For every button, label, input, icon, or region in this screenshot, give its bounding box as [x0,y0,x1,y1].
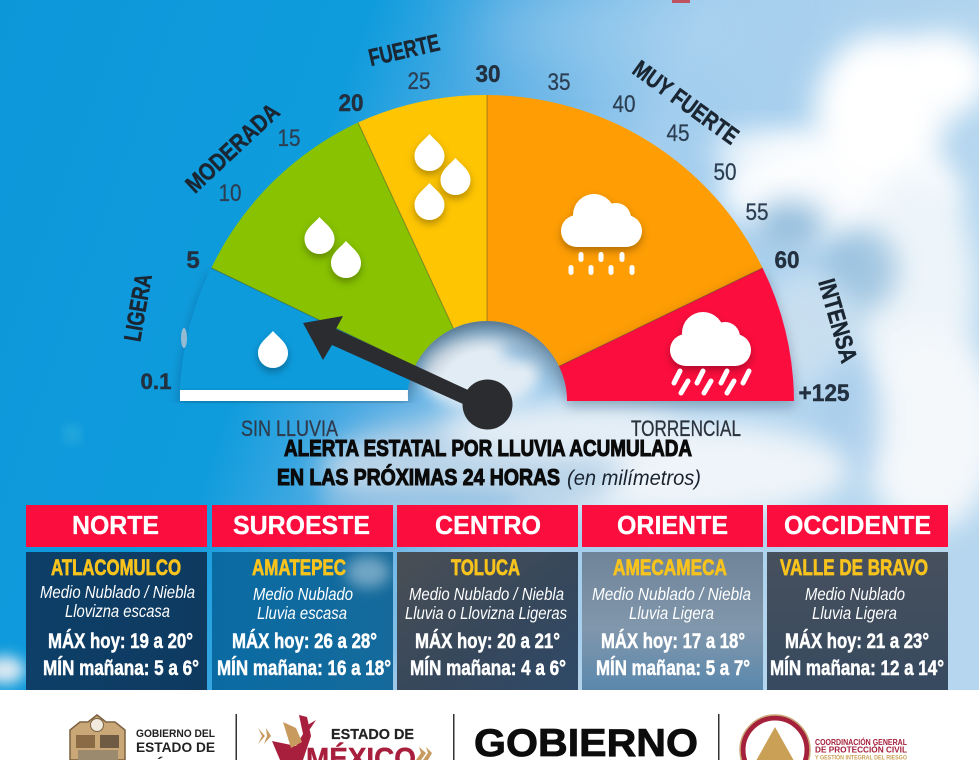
panel: centro: CENTRO [435,510,541,540]
panel: suroeste: AMATEPEC [252,555,346,580]
scale numbers: 10 [218,180,242,207]
panel: oriente [582,505,763,690]
icon: rain cloud [561,194,642,275]
panel: oriente: AMECAMECA [613,555,727,580]
icon: crest [70,715,125,760]
icon: two drops [304,217,361,278]
panel: suroeste: Lluvia escasa [257,603,347,623]
panel: norte: Medio Nublado / Niebla [40,582,195,602]
panel: occidente: Lluvia Ligera [812,603,897,623]
panel: occidente: Medio Nublado [805,584,905,604]
segment: ligera blue [180,268,415,390]
panel: occidente: VALLE DE BRAVO [780,555,928,580]
panel: suroeste: MÁX hoy: 26 a 28° [232,630,377,653]
white base bar [180,390,408,401]
panel: occidente [767,505,948,690]
panel: occidente: MÍN mañana: 12 a 14° [770,657,944,680]
category label: moderada: MODERADA [181,98,285,199]
gauge [180,95,794,401]
panel: centro: MÁX hoy: 20 a 21° [415,630,560,653]
scale numbers: 30 [476,61,500,88]
scale numbers [140,61,850,407]
panel: norte: MÁX hoy: 19 a 20° [48,630,193,653]
icon: triangle badge [740,715,810,760]
panel: occidente: OCCIDENTE [784,510,931,540]
icon: torrential cloud [670,312,751,393]
scale numbers: 20 [338,90,364,117]
scale numbers: +125 [798,380,850,407]
panel: centro: MÍN mañana: 4 a 6° [410,657,566,680]
logo: estado de mexico: ESTADO DE [331,726,414,743]
panel: norte: NORTE [72,510,159,540]
segment: intensa red [559,268,794,401]
panel: oriente: ORIENTE [617,510,728,540]
logo: proteccion civil [740,715,907,760]
panel: norte [26,505,207,690]
segment: muy fuerte orange [487,95,763,366]
panel: suroeste: SUROESTE [233,510,370,540]
category label: muy fuerte: MUY FUERTE [627,56,744,150]
title: ALERTA ESTATAL POR LLUVIA ACUMULADA [284,435,692,461]
category label: intensa: INTENSA [812,276,862,366]
panel: norte: ATLACOMULCO [51,555,181,580]
panel: suroeste: Medio Nublado [253,584,353,604]
scale numbers: 55 [746,199,768,226]
panel: suroeste [212,505,393,690]
hole shading [407,321,567,401]
icon: three drops [414,134,470,220]
scale numbers: 15 [278,125,300,152]
panel: oriente: MÁX hoy: 17 a 18° [601,630,745,653]
segment: moderada green [211,122,453,366]
scale numbers: 45 [666,120,690,147]
panel: norte: Llovizna escasa [65,601,170,621]
panel: occidente: MÁX hoy: 21 a 23° [785,630,929,653]
panel: centro: Lluvia o Llovizna Ligeras [405,603,567,623]
logo: proteccion civil: DE PROTECCIÓN CIVIL [815,746,907,754]
scale numbers: 60 [774,247,800,274]
scale numbers: 50 [714,159,736,186]
label: torrencial: TORRENCIAL [631,416,741,441]
logo: estado de mexico [258,715,432,760]
panel: centro: TOLUCA [451,555,520,580]
title: EN LAS PRÓXIMAS 24 HORAS [277,463,560,490]
category label: fuerte: FUERTE [366,29,442,72]
icon: single drop [258,331,288,368]
footer band [0,690,979,760]
panel: centro [397,505,578,690]
panel: oriente: Medio Nublado / Niebla [592,584,751,604]
logo: gobierno del estado de mexico [70,715,215,760]
logo: gobierno del estado de mexico: ESTADO DE [136,739,215,755]
scale numbers: 0.1 [140,369,172,394]
icon: hummingbird [258,715,316,760]
logo: gobierno del estado de mexico: GOBIERNO DEL [136,728,215,740]
category label: ligera: LIGERA [119,272,158,344]
panel: suroeste: MÍN mañana: 16 a 18° [217,657,391,680]
logo: proteccion civil: COORDINACIÓN GENERAL [815,738,907,747]
scale numbers: 25 [408,68,430,95]
needle arrow [303,316,512,430]
scale numbers: 35 [548,69,570,96]
panel: norte: MÍN mañana: 5 a 6° [43,657,199,680]
scale numbers: 40 [612,91,636,118]
panel: oriente: Lluvia Ligera [629,603,714,623]
panel: oriente: MÍN mañana: 5 a 7° [596,657,750,680]
title: (en milímetros) [567,467,701,490]
segment: fuerte yellow [358,95,487,328]
scale numbers: 5 [186,247,200,274]
title [277,435,701,490]
label: sin lluvia: SIN LLUVIA [241,416,338,441]
panel: centro: Medio Nublado / Niebla [409,584,564,604]
